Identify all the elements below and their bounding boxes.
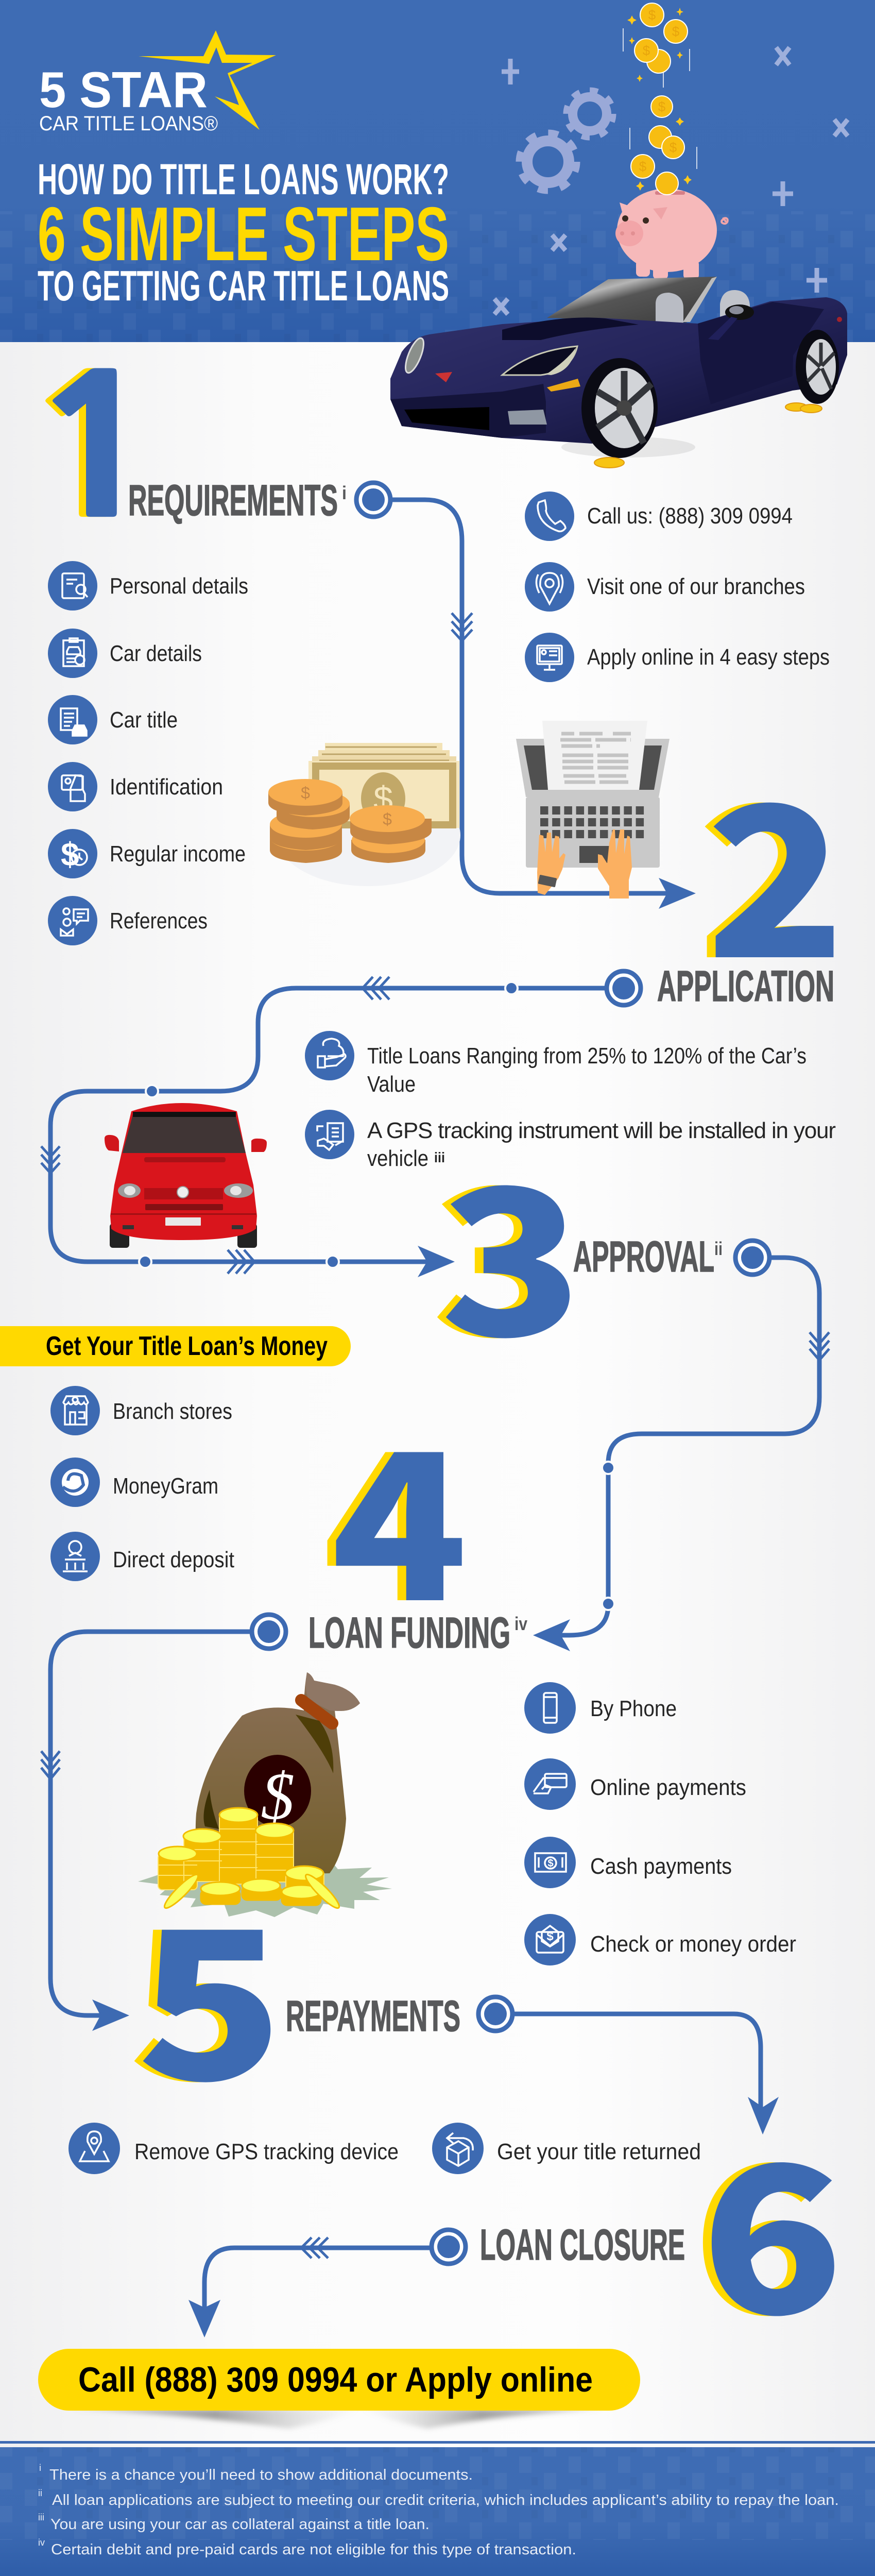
numeral 2: 2 xyxy=(706,715,845,1018)
illustration: red van xyxy=(105,1103,267,1248)
heading: requirements: i xyxy=(342,482,347,503)
banner: get your title loan's money xyxy=(0,1326,351,1366)
numeral 6: 6 xyxy=(692,2077,835,2372)
item: car details: Car details xyxy=(110,641,202,666)
logo: 5 Star Car Title Loans xyxy=(39,30,276,135)
step 1: requirements xyxy=(22,352,845,1018)
item: GPS tracking xyxy=(305,1110,836,1171)
illustration: cash and coins: $ xyxy=(301,784,310,802)
arrow: step 4 to step 5 xyxy=(41,1615,286,2031)
list: how to apply xyxy=(525,492,830,682)
arrow: step 1 to step 2 xyxy=(356,483,696,909)
item: call us xyxy=(525,492,793,541)
icon: falling coins: $ xyxy=(670,140,677,155)
heading: requirements xyxy=(128,476,347,524)
heading: repayments: REPAYMENTS xyxy=(286,1992,460,2040)
item: call us: Call us: (888) 309 0994 xyxy=(587,503,793,529)
list: requirements xyxy=(48,561,248,945)
item: moneygram xyxy=(50,1458,218,1507)
logo: 5 Star Car Title Loans: CAR TITLE LOANS® xyxy=(39,112,218,135)
title: HOW DO TITLE LOANS WORK? xyxy=(38,155,449,204)
numeral 4: 4 xyxy=(331,1364,468,1659)
item: loan range: Value xyxy=(367,1072,416,1097)
illustration: cash and coins: $ xyxy=(373,779,393,819)
footer xyxy=(0,2441,875,2576)
title: TO GETTING CAR TITLE LOANS xyxy=(38,262,449,310)
item: remove GPS device xyxy=(68,2123,399,2174)
item: apply online: Apply online in 4 easy steps xyxy=(587,645,830,670)
item: by phone xyxy=(524,1682,677,1734)
heading: loan funding: iv xyxy=(514,1613,527,1634)
heading: approval: APPROVAL xyxy=(573,1232,714,1281)
item: GPS tracking: iii xyxy=(434,1149,445,1165)
item: car details xyxy=(48,629,202,678)
item: GPS tracking: vehicle xyxy=(367,1146,428,1171)
icon: hands xyxy=(537,829,632,899)
item: regular income: $ xyxy=(61,836,79,873)
icon: falling coins: $ xyxy=(658,99,666,114)
illustration: money bag and coins xyxy=(138,1672,392,1917)
arrow: step 2 to step 3 xyxy=(41,971,641,1277)
numeral 4: 4 xyxy=(322,1364,459,1659)
footnotes: iii xyxy=(38,2512,44,2522)
item: apply online xyxy=(525,633,830,682)
heading: approval: ii xyxy=(714,1238,723,1259)
call to action button xyxy=(38,2349,640,2429)
item: references: References xyxy=(110,908,208,934)
footnotes: ii xyxy=(38,2488,42,2498)
step 4: loan funding xyxy=(41,1608,796,2139)
item: remove GPS device: Remove GPS tracking device xyxy=(134,2139,399,2164)
item: check or money order: $ xyxy=(546,1929,554,1943)
footnotes: i xyxy=(39,2463,41,2473)
numeral 2: 2 xyxy=(697,715,836,1018)
header banner xyxy=(0,0,875,468)
item: personal details: Personal details xyxy=(110,573,248,599)
arrow: step 3 to step 4 xyxy=(533,1241,829,1651)
item: car title: Car title xyxy=(110,707,178,733)
arrow: step 5 to step 6 xyxy=(478,1997,779,2134)
step 6: loan closure xyxy=(38,2221,685,2429)
numeral 1: 1 xyxy=(29,352,165,544)
numeral 5: 5 xyxy=(137,1841,284,2139)
item: moneygram: MoneyGram xyxy=(113,1473,218,1499)
item: check or money order: Check or money order xyxy=(590,1931,796,1957)
arrow: step 6 to call to action xyxy=(188,2230,466,2337)
item: cash payments: Cash payments xyxy=(590,1854,732,1879)
title: 6 SIMPLE STEPS xyxy=(38,192,449,277)
footnotes: There is a chance you’ll need to show additional documents. xyxy=(49,2467,473,2483)
item: loan range: Title Loans Ranging from 25% to 120% of the Car’s xyxy=(367,1043,807,1069)
item: branch stores xyxy=(50,1386,232,1435)
title xyxy=(38,155,449,310)
heading: loan funding xyxy=(308,1608,527,1657)
heading: approval xyxy=(573,1232,723,1281)
item: visit branches: Visit one of our branches xyxy=(587,574,805,599)
call to action button: Call (888) 309 0994 or Apply online xyxy=(78,2360,593,2399)
icon: falling coins: $ xyxy=(639,159,647,174)
illustration: cash and coins xyxy=(268,743,460,886)
item: get your title returned xyxy=(432,2123,701,2174)
icon: falling coins: $ xyxy=(672,24,680,39)
numeral 5: 5 xyxy=(128,1841,275,2139)
illustration: laptop with application xyxy=(516,721,670,899)
step 2: application xyxy=(41,962,836,1394)
footnotes: All loan applications are subject to meeting our credit criteria, which includes applicant’s ability to repay the loan. xyxy=(52,2492,839,2509)
item: branch stores: Branch stores xyxy=(113,1399,232,1424)
item: direct deposit xyxy=(50,1532,234,1581)
numeral 3: 3 xyxy=(440,1100,582,1394)
banner: get your title loan's money: Get Your Title Loan’s Money xyxy=(46,1331,328,1361)
item: by phone: By Phone xyxy=(590,1696,677,1721)
item: identification: Identification xyxy=(110,774,223,800)
item: cash payments xyxy=(524,1837,732,1888)
icon: gears xyxy=(519,90,613,191)
numeral 3: 3 xyxy=(432,1100,574,1394)
icon: navy convertible car xyxy=(390,277,847,468)
item: identification xyxy=(48,762,223,811)
item: regular income: Regular income xyxy=(110,841,246,867)
item: get your title returned: Get your title returned xyxy=(497,2139,701,2164)
item: check or money order xyxy=(524,1914,796,1965)
icon: falling coins xyxy=(623,3,697,191)
heading: loan closure: LOAN CLOSURE xyxy=(480,2221,685,2269)
numeral 1: 1 xyxy=(22,352,158,544)
item: loan range xyxy=(305,1031,807,1097)
item: visit branches xyxy=(525,562,805,612)
item: regular income xyxy=(48,829,246,878)
icon: falling coins: $ xyxy=(648,7,656,23)
illustration: cash and coins: $ xyxy=(383,810,392,828)
item: personal details xyxy=(48,561,248,611)
logo: 5 Star Car Title Loans: 5 STAR xyxy=(39,61,208,118)
icon: falling coins: $ xyxy=(643,43,650,58)
item: direct deposit: Direct deposit xyxy=(113,1547,234,1572)
item: cash payments: $ xyxy=(547,1858,554,1869)
item: online payments xyxy=(524,1758,746,1810)
step 5: repayments xyxy=(68,1992,844,2372)
decorative plus and x marks xyxy=(494,47,848,314)
numeral 6: 6 xyxy=(701,2077,844,2372)
item: car title xyxy=(48,695,178,744)
icon: piggy bank xyxy=(615,172,728,279)
footnotes xyxy=(38,2463,839,2558)
illustration: money bag and coins: $ xyxy=(261,1759,295,1834)
footnotes: You are using your car as collateral against a title loan. xyxy=(50,2516,430,2533)
heading: loan funding: LOAN FUNDING xyxy=(308,1608,510,1657)
heading: requirements: REQUIREMENTS xyxy=(128,476,338,524)
footnotes: Certain debit and pre-paid cards are not eligible for this type of transaction. xyxy=(51,2541,576,2558)
item: GPS tracking: A GPS tracking instrument will be installed in your xyxy=(367,1118,836,1143)
step 3: approval xyxy=(0,1232,829,1659)
item: references xyxy=(48,896,208,945)
footnotes: iv xyxy=(38,2537,45,2548)
item: online payments: Online payments xyxy=(590,1775,746,1800)
